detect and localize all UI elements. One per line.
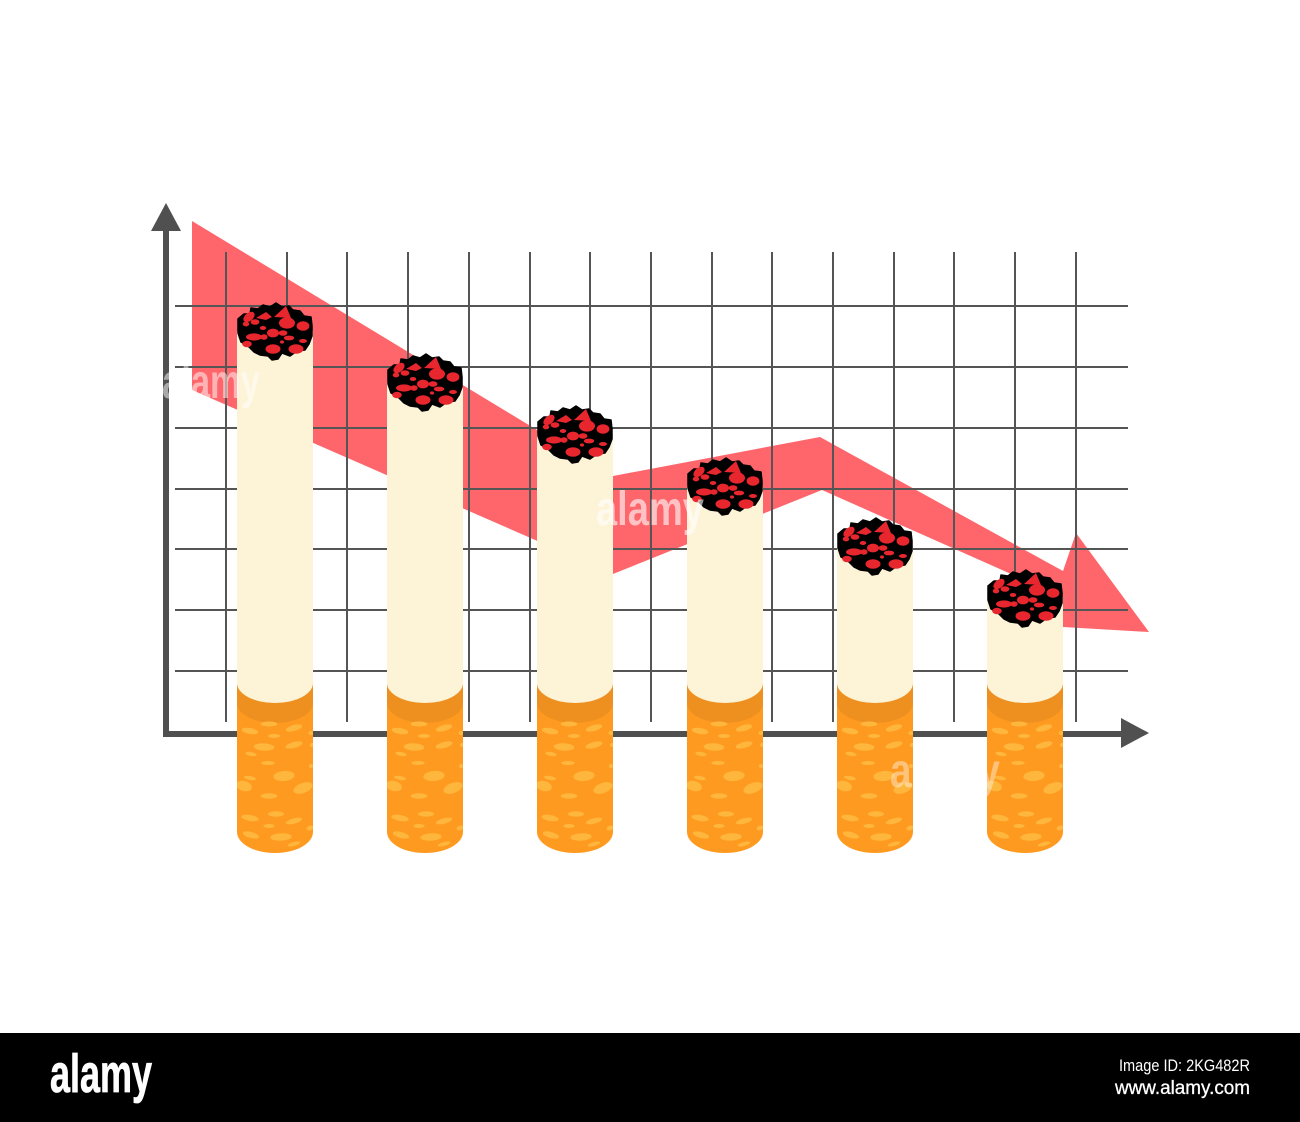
cigarette bar 1 xyxy=(235,303,314,853)
footer logo: alamy xyxy=(50,1044,152,1104)
red downward trend arrow xyxy=(192,221,1149,632)
cigarette bar 4 xyxy=(685,458,764,853)
website: www.alamy.com xyxy=(1114,1078,1250,1099)
vertical axis with arrow xyxy=(151,203,181,736)
chart grid xyxy=(175,252,1128,722)
watermark centre: alamy xyxy=(596,483,704,536)
cigarette bar 5 xyxy=(835,518,914,853)
cigarette bar 6 xyxy=(985,570,1064,853)
image id: Image ID: 2KG482R xyxy=(1119,1056,1250,1075)
cigarette bar 2 xyxy=(385,354,464,853)
watermark lower right: alamy xyxy=(890,745,1000,798)
watermark left: alamy xyxy=(162,356,260,409)
horizontal axis with arrow xyxy=(163,718,1149,748)
cigarette bar 3 xyxy=(535,406,614,853)
footer bar xyxy=(0,1033,1300,1122)
